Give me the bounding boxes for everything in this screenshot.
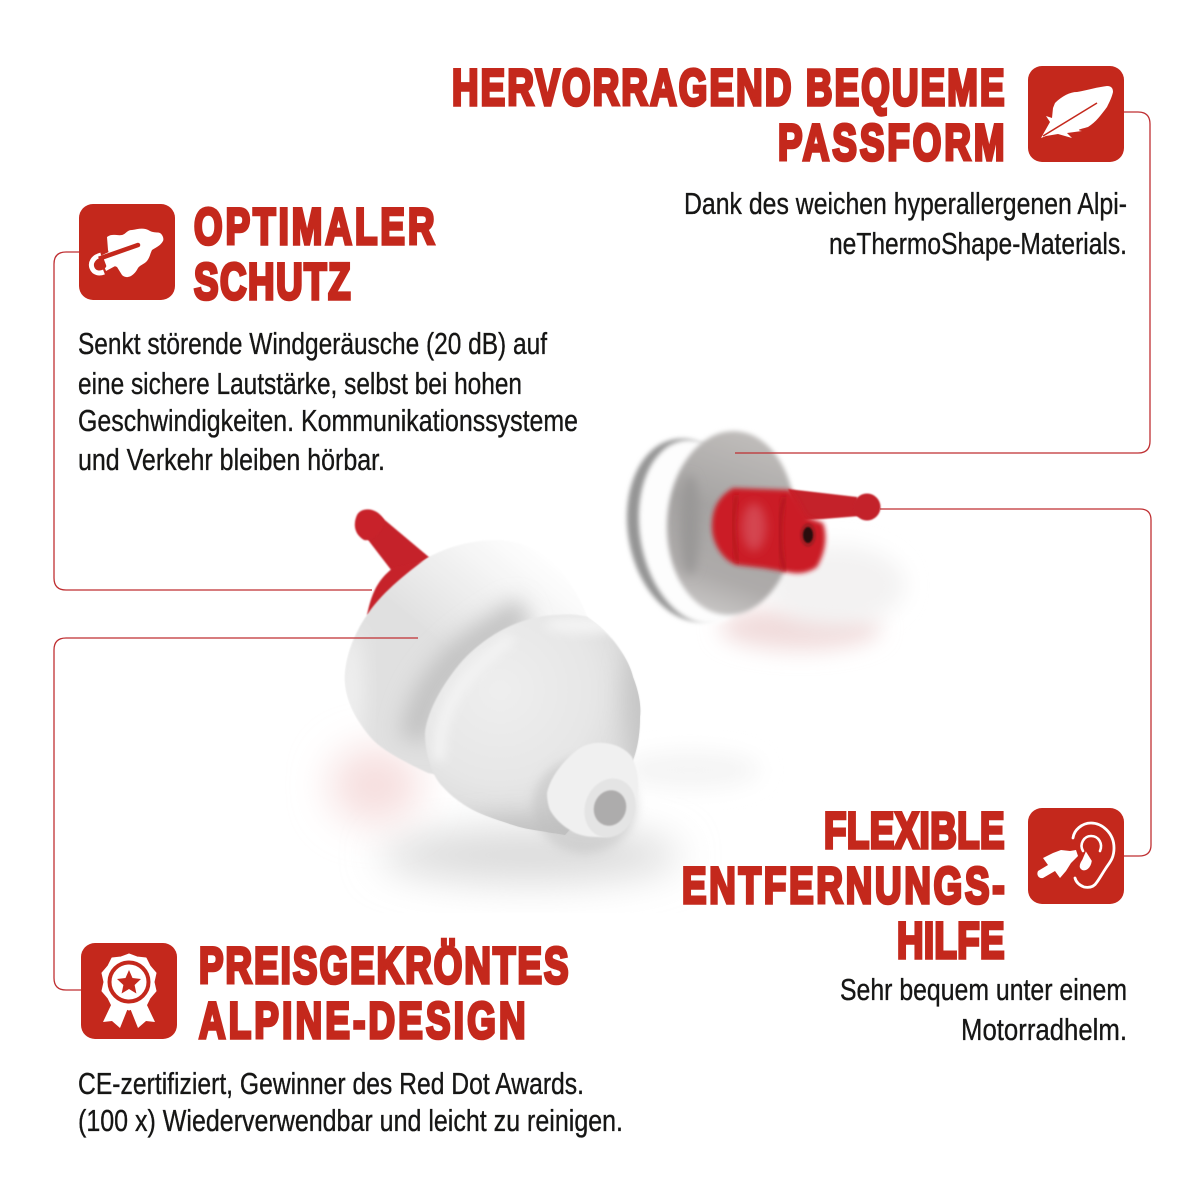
connector: comfort icon to background plug (735, 112, 1150, 453)
heading: protection: OPTIMALER (194, 199, 434, 255)
text: award description (78, 1066, 623, 1138)
heading: comfort: PASSFORM (778, 115, 1005, 171)
connector: design icon to foam tip (54, 638, 418, 990)
panel: flexible Entfernungshilfe (682, 803, 1127, 1047)
icon: feather (1028, 66, 1124, 162)
text: comfort description: neThermoShape-Materials. (829, 226, 1127, 261)
text: removal aid description: Sehr bequem unter einem (840, 972, 1127, 1007)
text: protection description (78, 326, 578, 477)
panel: optimaler Schutz (78, 199, 578, 477)
icon: ear with earplug (1028, 808, 1124, 904)
photo: large white earplug with red stem in the foreground (330, 509, 760, 881)
icon: earplug (79, 204, 175, 300)
heading: award: PREISGEKRÖNTES (199, 938, 569, 994)
photo: blurred red and white earplug in the background (613, 428, 905, 650)
heading: protection: SCHUTZ (194, 254, 351, 310)
panel: preisgekröntes Alpine-Design (78, 938, 623, 1138)
heading: removal aid: FLEXIBLE (824, 803, 1005, 859)
panel: bequeme Passform (452, 60, 1127, 261)
connector: protection icon to red plug (54, 252, 372, 590)
text: award description: CE-zertifiziert, Gewinner des Red Dot Awards. (78, 1066, 584, 1101)
text: removal aid description: Motorradhelm. (961, 1012, 1127, 1047)
heading: comfort: HERVORRAGEND BEQUEME (452, 60, 1005, 116)
heading: comfort (452, 60, 1005, 171)
heading: removal aid (682, 803, 1005, 969)
text: protection description: eine sichere Lautstärke, selbst bei hohen (78, 366, 522, 401)
text: protection description: Geschwindigkeiten. Kommunikationssysteme (78, 403, 578, 438)
text: removal aid description (840, 972, 1127, 1047)
heading: removal aid: HILFE (897, 913, 1004, 969)
text: comfort description (684, 186, 1127, 261)
text: protection description: Senkt störende Windgeräusche (20 dB) auf (78, 326, 547, 361)
heading: protection (194, 199, 434, 310)
text: protection description: und Verkehr bleiben hörbar. (78, 442, 385, 477)
icon: award rosette (81, 943, 177, 1039)
heading: award (199, 938, 569, 1049)
heading: removal aid: ENTFERNUNGS- (682, 858, 1005, 914)
text: award description: (100 x) Wiederverwendbar und leicht zu reinigen. (78, 1103, 623, 1138)
heading: award: ALPINE-DESIGN (199, 993, 526, 1049)
connector: removal aid icon to stem (880, 509, 1151, 856)
